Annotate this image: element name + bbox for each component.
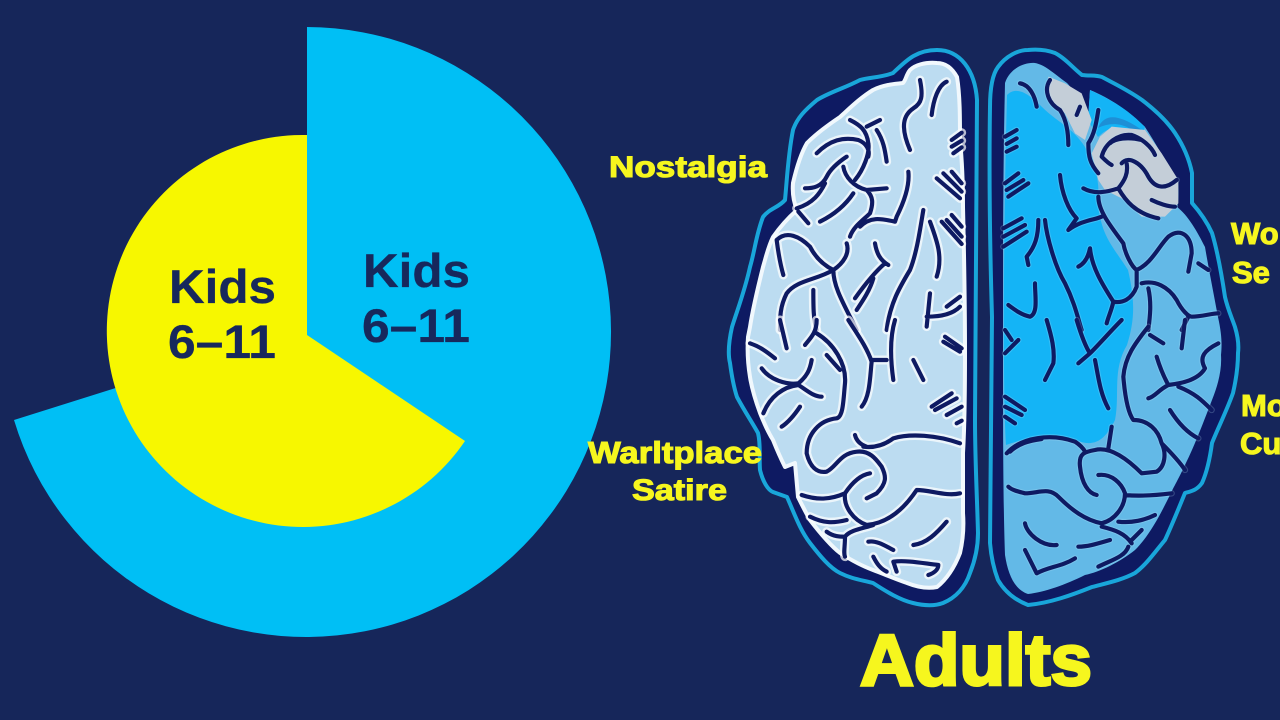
hemisphere outline <box>990 50 1238 605</box>
label: blue sector: 6–11 <box>362 299 470 352</box>
upper sulci <box>777 80 962 330</box>
brain: left hemisphere <box>729 50 978 605</box>
label: workplace satire: Satire <box>632 474 727 507</box>
blue outer sector <box>14 27 611 637</box>
lower sulci <box>1005 320 1218 573</box>
hemisphere outline <box>729 50 978 605</box>
lower sulci <box>750 320 962 575</box>
medium blue cortex <box>1003 63 1222 594</box>
yellow inner sector <box>107 135 465 527</box>
label: Nostalgia: Nostalgia <box>609 151 767 184</box>
label: clipped right top: Se <box>1232 255 1270 290</box>
pale grey lobes <box>1048 77 1178 217</box>
light cortex fill <box>748 63 965 588</box>
label: yellow sector <box>168 260 276 368</box>
darker blue highlight <box>1098 117 1142 135</box>
label: yellow sector: 6–11 <box>168 315 276 368</box>
label: yellow sector: Kids <box>169 260 276 313</box>
label: clipped right top <box>1231 216 1279 290</box>
brain: right hemisphere <box>990 50 1238 605</box>
cyan upper patch <box>1088 90 1145 137</box>
heading: Adults: Adults <box>860 621 1092 701</box>
label: workplace satire: Warltplace <box>588 435 762 470</box>
bright cyan center <box>1004 91 1133 445</box>
label: blue sector <box>362 244 470 352</box>
upper sulci <box>1003 80 1218 330</box>
chart: nested pie <box>14 27 611 637</box>
label: clipped right bottom <box>1240 388 1280 461</box>
label: blue sector: Kids <box>363 244 470 297</box>
label: clipped right top: Wo <box>1231 216 1279 251</box>
label: workplace satire <box>588 435 762 507</box>
